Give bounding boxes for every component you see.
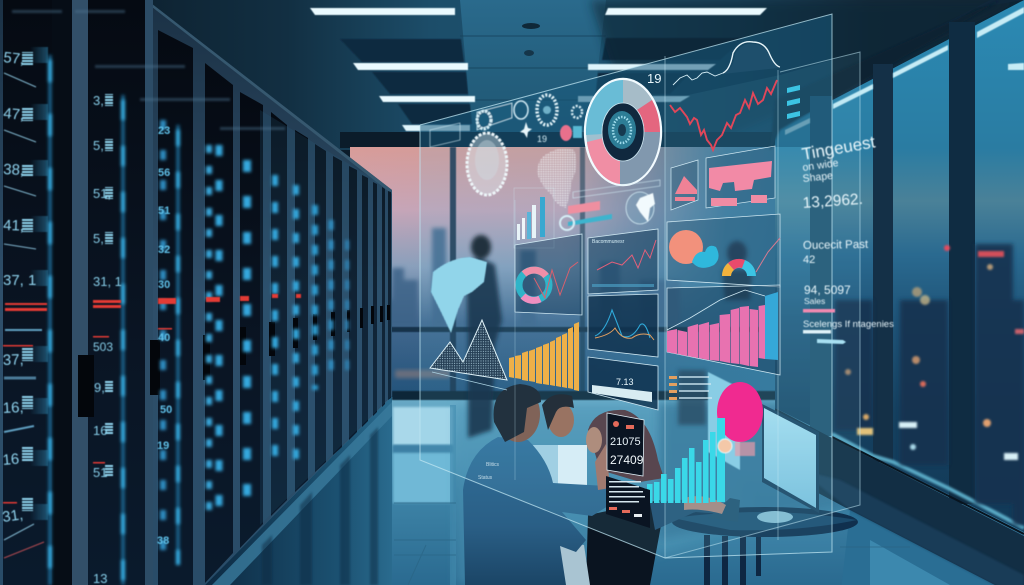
donut trend panel <box>515 234 582 315</box>
gauge circles and cogs, top-left <box>430 95 582 147</box>
rack status light strips <box>50 55 347 585</box>
value 42: 42 <box>803 254 815 266</box>
rack numeric readouts, first column: 37, <box>3 351 24 369</box>
label: Sales <box>804 296 825 306</box>
large donut chart <box>585 79 661 185</box>
rack numeric readouts, second and third columns <box>93 93 172 585</box>
rack numeric readouts, second and third columns: 51 <box>93 465 107 480</box>
rack numeric readouts, second and third columns: 3, <box>93 93 104 108</box>
pink block chart <box>706 146 775 208</box>
rack numeric readouts, first column: 57, <box>3 49 25 68</box>
far window with sunset skyline <box>350 147 822 400</box>
rack numeric readouts, second and third columns: 16 <box>93 423 107 438</box>
rack numeric readouts, first column: 41, <box>3 217 24 235</box>
large radial gauge, left <box>467 133 507 195</box>
ceiling <box>0 0 1024 150</box>
rack numeric readouts, second and third columns: 50 <box>160 404 172 416</box>
small status icons <box>718 439 755 456</box>
rack numeric readouts, first column: 38, <box>3 161 25 179</box>
rack numeric readouts, first column: 16 <box>2 451 20 469</box>
mountain area chart <box>430 320 507 390</box>
rack numeric readouts, second and third columns: 51, <box>93 186 111 201</box>
glass dashboard panel <box>420 14 860 558</box>
rack handles <box>78 305 390 417</box>
night city through right windows <box>835 244 1024 525</box>
rack red alert lights <box>3 294 301 504</box>
woman colleague <box>586 410 726 585</box>
rack numeric readouts, first column: 16, <box>2 399 24 417</box>
man, second colleague <box>542 394 590 585</box>
sub text: Shape: Shape <box>802 170 834 185</box>
world map globe <box>626 192 655 224</box>
value label 19: 19 <box>647 71 661 86</box>
white progress bar <box>803 330 831 334</box>
small labels on shirt: Blitics <box>486 462 500 468</box>
rack numeric readouts, second and third columns: 503 <box>93 340 113 354</box>
person in background, right silhouette <box>678 241 752 425</box>
trend line panel: Bacommunesr <box>592 239 625 245</box>
dark numbers card: 27409 <box>610 453 644 467</box>
value: 94, 5097 <box>804 283 851 297</box>
rack numeric readouts, first column: 37, 1 <box>3 272 36 289</box>
rack numeric readouts, first column <box>1 47 48 558</box>
yellow rising bar chart <box>509 322 579 391</box>
pink mountain mini-chart <box>671 160 698 210</box>
rack numeric readouts, second and third columns: 23 <box>158 125 170 137</box>
value: 13,2962. <box>802 191 863 212</box>
small labels on shirt <box>478 462 500 481</box>
pink progress bar <box>803 309 835 312</box>
laptop screen <box>525 445 587 494</box>
back monitor <box>708 372 740 470</box>
rack numeric readouts, first column: 31, <box>1 506 24 526</box>
person in background, silhouette <box>466 235 502 438</box>
heading: Tingeuest: Tingeuest <box>800 132 877 164</box>
dark numbers card <box>607 413 644 476</box>
dark numbers card: 21075 <box>610 436 641 448</box>
rack glass doors <box>3 0 391 585</box>
desk <box>672 507 858 585</box>
rack numeric readouts, second and third columns: 30 <box>158 279 170 291</box>
low wall under the windows <box>775 408 1024 585</box>
dotted region map <box>537 148 577 208</box>
small labels on shirt: Status <box>478 475 493 481</box>
small cyan legend bars <box>787 85 800 119</box>
ceiling lights <box>310 8 767 131</box>
trend line panel <box>588 229 658 294</box>
pie and gauge panel <box>667 214 780 287</box>
rack numeric readouts, second and third columns: 56 <box>158 167 170 179</box>
man, foreground colleague <box>463 384 610 585</box>
rack numeric readouts, second and third columns: 5, <box>93 138 104 153</box>
rack numeric readouts, second and third columns: 38 <box>157 535 169 547</box>
small bar chart, pale and blue <box>514 188 554 248</box>
gauge circles and cogs, top-left: 19 <box>537 134 547 144</box>
right window wall <box>770 0 1024 532</box>
rack numeric readouts, second and third columns: 9, <box>94 380 105 395</box>
keyboard <box>708 498 740 522</box>
table panel with value: 7.13 <box>616 377 634 387</box>
magenta circle <box>717 382 763 442</box>
server rack wall <box>0 0 392 585</box>
dotted world map <box>431 257 487 333</box>
legend list <box>669 376 712 400</box>
front monitor <box>757 404 819 523</box>
right-side KPI text <box>800 132 894 344</box>
dark list card <box>606 476 650 528</box>
rack numeric readouts, second and third columns: 32 <box>158 244 170 256</box>
rack numeric readouts, second and third columns: 19 <box>157 440 169 452</box>
table panel with value <box>588 357 658 410</box>
rack numeric readouts, second and third columns: 31, 1 <box>93 274 122 289</box>
floor <box>0 396 1024 585</box>
cyan arrow bar <box>817 339 846 344</box>
sub text: on wide: on wide <box>802 157 839 174</box>
blue and orange spike chart panel <box>588 294 658 357</box>
rack numeric readouts, second and third columns: 5, <box>93 231 104 246</box>
rack numeric readouts, first column: 47, <box>3 105 25 124</box>
rack numeric readouts, second and third columns: 51 <box>158 205 170 217</box>
cyan bar chart <box>640 418 725 503</box>
pink bar chart panel <box>667 285 780 375</box>
heading: Oucecit Past: Oucecit Past <box>803 239 869 252</box>
line charts, top-right <box>670 42 780 150</box>
faint glass reflections <box>12 10 285 130</box>
label: Scelengs If ntagenies <box>803 319 894 330</box>
pink and teal KPI bars <box>560 180 660 230</box>
rack numeric readouts, second and third columns: 40 <box>158 332 170 344</box>
